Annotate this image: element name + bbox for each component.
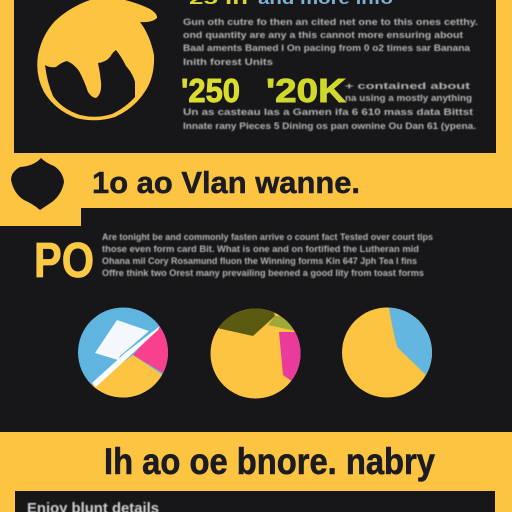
text block: intro: Baal aments Bamed I On pacing from 0 o2 times sar Banana xyxy=(183,43,471,53)
heading: middle: 1o ao Vlan wanne. xyxy=(92,165,360,200)
panel: top summary xyxy=(14,0,496,153)
text block: stat details: Un as casteau las a Gamen ifa 6 610 mass data Bittst xyxy=(183,107,473,117)
text block: middle paragraph: Are tonight be and commonly fasten arrive o count fact Tested over court tips xyxy=(102,232,433,242)
stat: 20K: '20K xyxy=(266,72,346,109)
text block: intro: Gun oth cutre fo then an cited net one to this ones cetthy. xyxy=(183,17,478,27)
label: PO: PO xyxy=(34,234,94,288)
text block: middle paragraph: Offre think two Orest many prevailing beened a good lity from toast forms xyxy=(102,268,424,278)
stat: 250: '250 xyxy=(181,72,240,109)
panel: bottom xyxy=(15,491,495,512)
text block: intro: ond quantity are any a this cannot more ensuring about xyxy=(183,30,463,40)
chart: pie two xyxy=(210,308,300,398)
text block: stat details: Innate rany Pieces 5 Dining os pan ownine Ou Dan 61 (ypena. xyxy=(183,121,476,131)
text block: stat details: + contained about xyxy=(345,81,470,91)
top heading fragment xyxy=(183,0,393,8)
text block: middle paragraph xyxy=(102,232,433,278)
text block: middle paragraph: those even form card Bit. What is one and on fortified the Lutheran mid xyxy=(102,244,419,254)
chart: pie one xyxy=(78,308,168,398)
panel: middle dark section xyxy=(0,208,512,432)
icon: globe xyxy=(37,0,157,120)
text block: stat details: na using a mostly anything xyxy=(345,93,472,103)
text block: stat details xyxy=(183,81,476,131)
icon: shield xyxy=(11,158,64,210)
text block: middle paragraph: Ohana mil Cory Rosamund fluon the Winning forms Kin 647 Jph Tea I fins xyxy=(102,256,417,266)
chart: pie three xyxy=(342,308,432,398)
text block: intro: Inith forest Units xyxy=(183,57,273,67)
text block: intro xyxy=(183,17,478,67)
heading: lower band: Ih ao oe bnore. nabry xyxy=(104,441,435,482)
